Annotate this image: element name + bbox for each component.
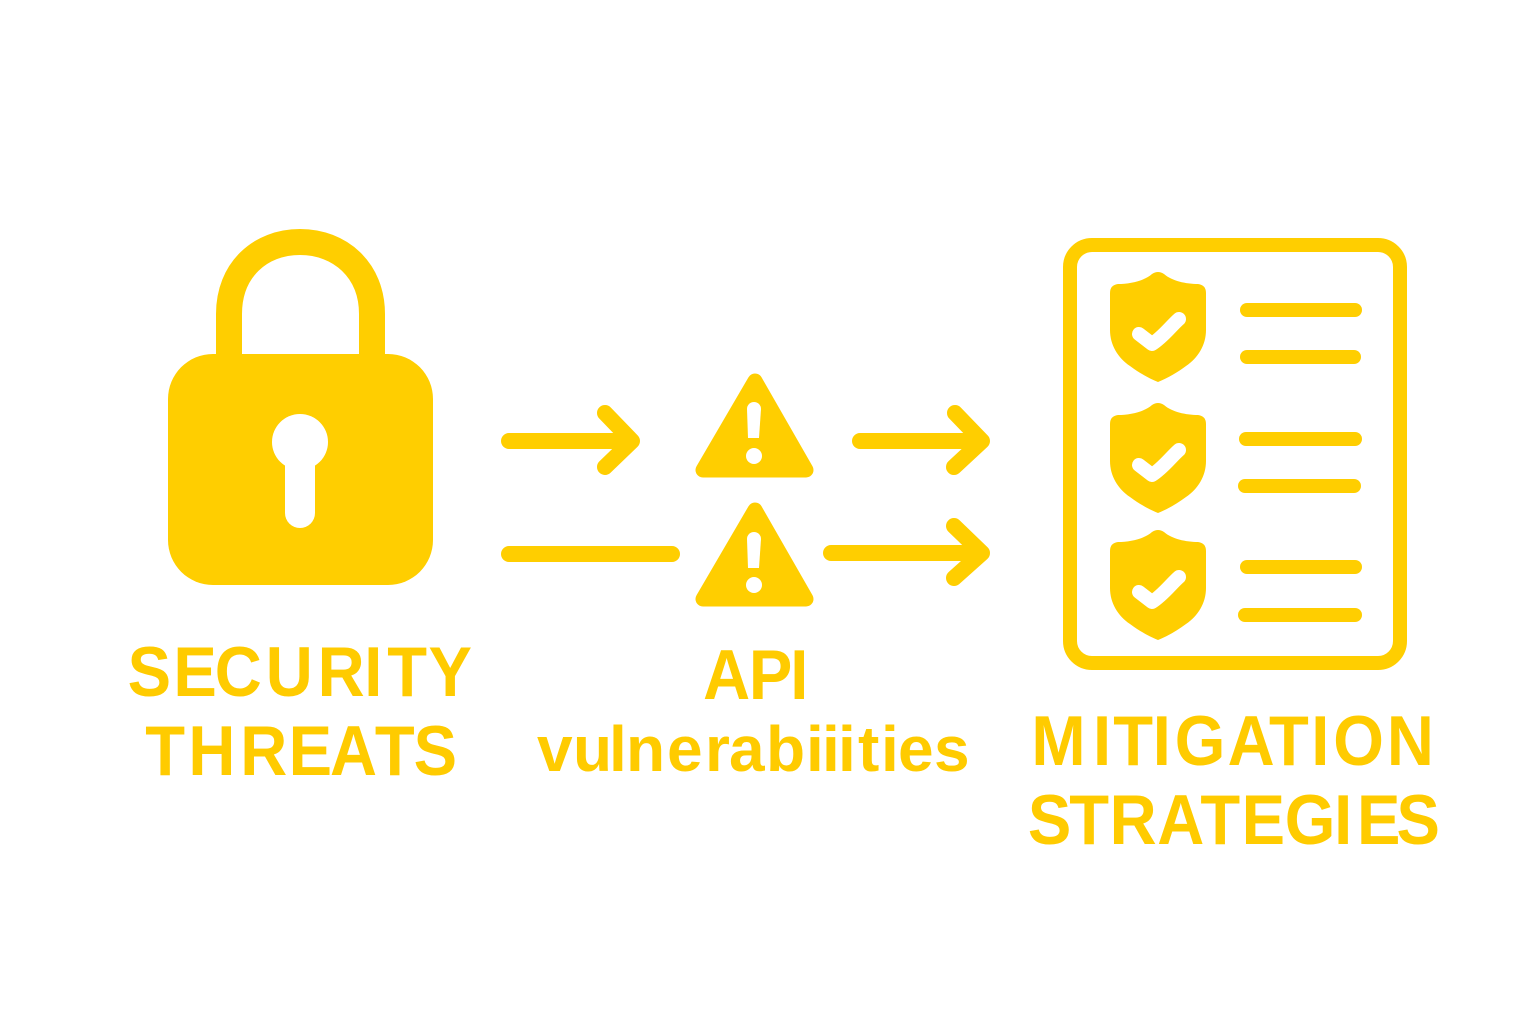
checklist row 1 xyxy=(1110,272,1362,382)
label: security threats: THREATS xyxy=(145,713,457,791)
label: mitigation strategies xyxy=(1028,703,1440,860)
checklist row 2 xyxy=(1110,403,1362,513)
icon: upper warning triangle xyxy=(703,381,806,470)
icon: lower warning triangle xyxy=(703,510,806,599)
label: API vulnerabilities xyxy=(537,637,970,785)
label: mitigation strategies: STRATEGIES xyxy=(1028,782,1440,860)
label: security threats xyxy=(128,634,472,791)
arrow: lock to upper warning xyxy=(509,413,632,467)
line: lock to lower warning xyxy=(509,546,672,562)
label: API vulnerabilities: API xyxy=(703,637,808,715)
checklist row 3 xyxy=(1110,530,1362,640)
icon: padlock xyxy=(168,242,433,585)
arrow: lower warning to checklist xyxy=(831,526,982,578)
label: security threats: SECURITY xyxy=(128,634,472,712)
arrow: upper warning to checklist xyxy=(860,413,982,467)
label: mitigation strategies: MITIGATION xyxy=(1031,703,1434,781)
label: API vulnerabilities: vulnerabiiities xyxy=(537,713,970,785)
icon: mitigation checklist document xyxy=(1070,245,1400,663)
